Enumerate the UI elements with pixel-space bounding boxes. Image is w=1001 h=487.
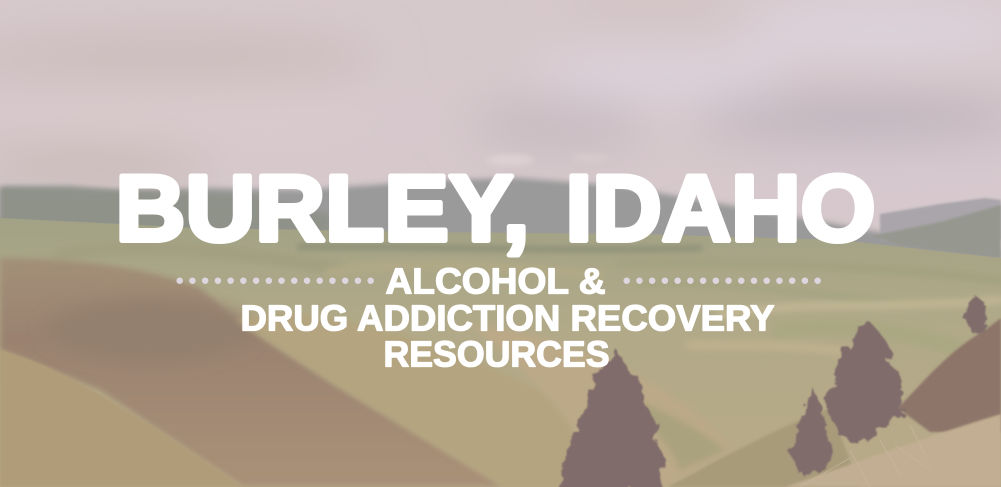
- right dark knoll: [898, 318, 1001, 432]
- lit hill: [236, 314, 650, 487]
- subtitle: ALCOHOL &: [386, 260, 606, 302]
- subtitle: [240, 260, 774, 374]
- title: BURLEY,: [116, 156, 530, 260]
- tree: centre pine: [560, 350, 666, 487]
- lower left hill: [0, 350, 243, 487]
- rolling fields: [0, 218, 1001, 487]
- left forested slope: [0, 258, 505, 487]
- cloud wisps: [486, 154, 608, 166]
- dotted divider: [180, 277, 820, 284]
- green slope: [600, 390, 725, 470]
- grass foreground: [785, 414, 1001, 487]
- trees: [560, 296, 988, 487]
- centre hill: [470, 325, 730, 487]
- field bands: [60, 247, 1000, 355]
- valley ridge: [668, 408, 860, 487]
- dark forest patch: [45, 298, 255, 362]
- tree: far-right sapling: [965, 296, 988, 336]
- title: [116, 156, 876, 260]
- title: IDAHO: [566, 156, 876, 260]
- tree: small right pine: [790, 388, 832, 475]
- tree: right pine: [825, 320, 904, 445]
- dry grass blades: [800, 425, 930, 487]
- subtitle: RESOURCES: [384, 334, 610, 374]
- distant mountains: [0, 178, 1001, 270]
- subtitle: DRUG ADDICTION RECOVERY: [240, 298, 774, 338]
